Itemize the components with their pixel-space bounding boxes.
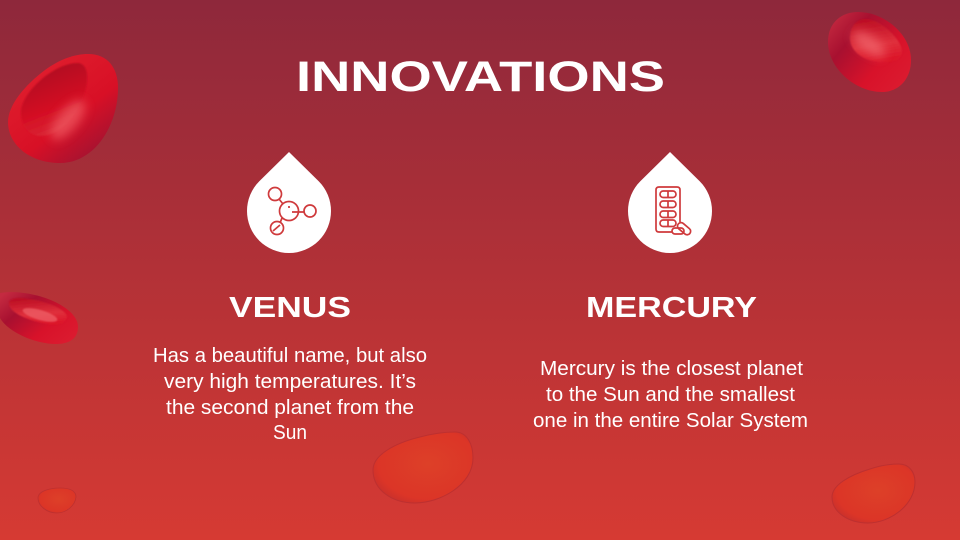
text block: Mercury description: to the Sun and the smallest: [546, 384, 795, 406]
text block: Venus description: [153, 345, 427, 444]
text block: Mercury description: [533, 358, 808, 432]
text block: Mercury description: Mercury is the closest planet: [540, 358, 803, 380]
text block: Venus description: Sun: [273, 422, 307, 444]
blood cell: top left: [8, 54, 118, 163]
blood cell: faded bottom right: [832, 464, 915, 523]
text block: Venus description: very high temperatures. It’s: [164, 371, 416, 393]
text block: Mercury description: one in the entire Solar System: [533, 410, 808, 432]
title: INNOVATIONS: [296, 53, 665, 101]
text block: Venus description: the second planet from the: [166, 397, 414, 419]
blood cell: top right: [828, 12, 911, 92]
heading: Venus: VENUS: [229, 292, 351, 324]
text block: Venus description: Has a beautiful name, but also: [153, 345, 427, 367]
blood cell: left middle: [0, 292, 78, 344]
column: Venus: [153, 152, 427, 444]
icon: drop with pills: [628, 152, 712, 253]
icon: drop with molecule: [247, 152, 331, 253]
heading: Mercury: MERCURY: [586, 292, 757, 324]
blood cell: faded bottom left: [38, 488, 76, 513]
blood cell: faded centre bottom: [373, 432, 473, 503]
column: Mercury: [533, 152, 808, 432]
